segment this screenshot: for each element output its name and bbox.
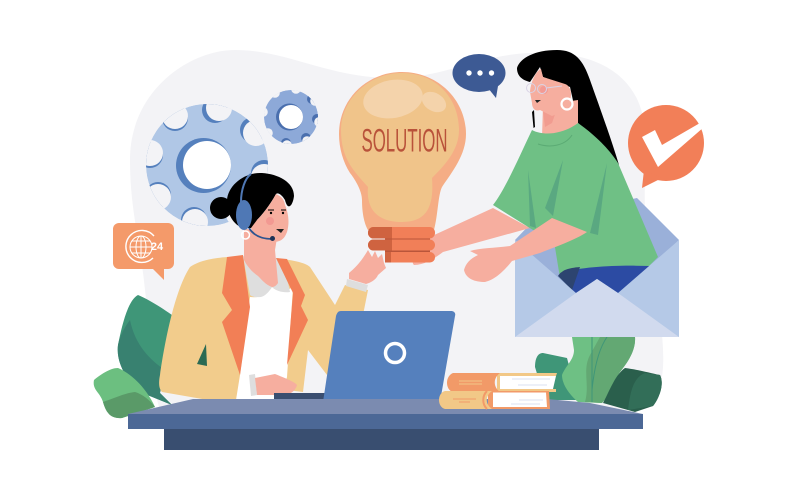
neck	[542, 100, 578, 137]
keyboard hand	[249, 374, 257, 396]
lower arm	[464, 218, 587, 282]
envelope front	[515, 240, 679, 337]
green shirt	[493, 123, 658, 278]
ear	[560, 86, 570, 98]
plant: right leaves	[535, 337, 662, 412]
icon: 24 hour speech bubble: 24	[151, 241, 164, 253]
trousers	[560, 266, 650, 296]
stacked books	[439, 373, 557, 409]
neck	[244, 228, 278, 287]
right woman	[413, 50, 679, 337]
shirt	[236, 287, 293, 400]
headset	[236, 174, 275, 241]
earring	[562, 98, 572, 110]
icon: small gear	[264, 90, 318, 144]
lower book	[439, 391, 550, 409]
face	[530, 69, 571, 116]
bulb label: SOLUTION	[362, 122, 448, 158]
glasses	[526, 84, 562, 94]
lapel right	[276, 258, 308, 365]
lapel left	[222, 255, 250, 375]
raised hand	[346, 279, 368, 292]
left woman	[159, 173, 386, 400]
envelope back	[515, 198, 679, 300]
face	[251, 194, 288, 242]
icon: large gear	[146, 104, 268, 226]
laptop	[274, 311, 455, 402]
speech bubble with dots	[452, 54, 506, 98]
icon: check mark speech bubble	[628, 105, 704, 188]
background blob	[130, 50, 663, 410]
icon: 24 hour speech bubble	[113, 223, 174, 280]
desk	[128, 399, 643, 450]
jacket	[159, 257, 368, 400]
light bulb	[339, 72, 466, 262]
collar	[243, 256, 290, 297]
hair	[517, 50, 619, 165]
upper arm holding bulb	[413, 208, 530, 265]
hair	[210, 197, 232, 219]
upper book	[447, 373, 557, 392]
pocket	[197, 344, 207, 366]
bulb base	[368, 227, 435, 262]
plant: left leaves	[94, 295, 172, 418]
